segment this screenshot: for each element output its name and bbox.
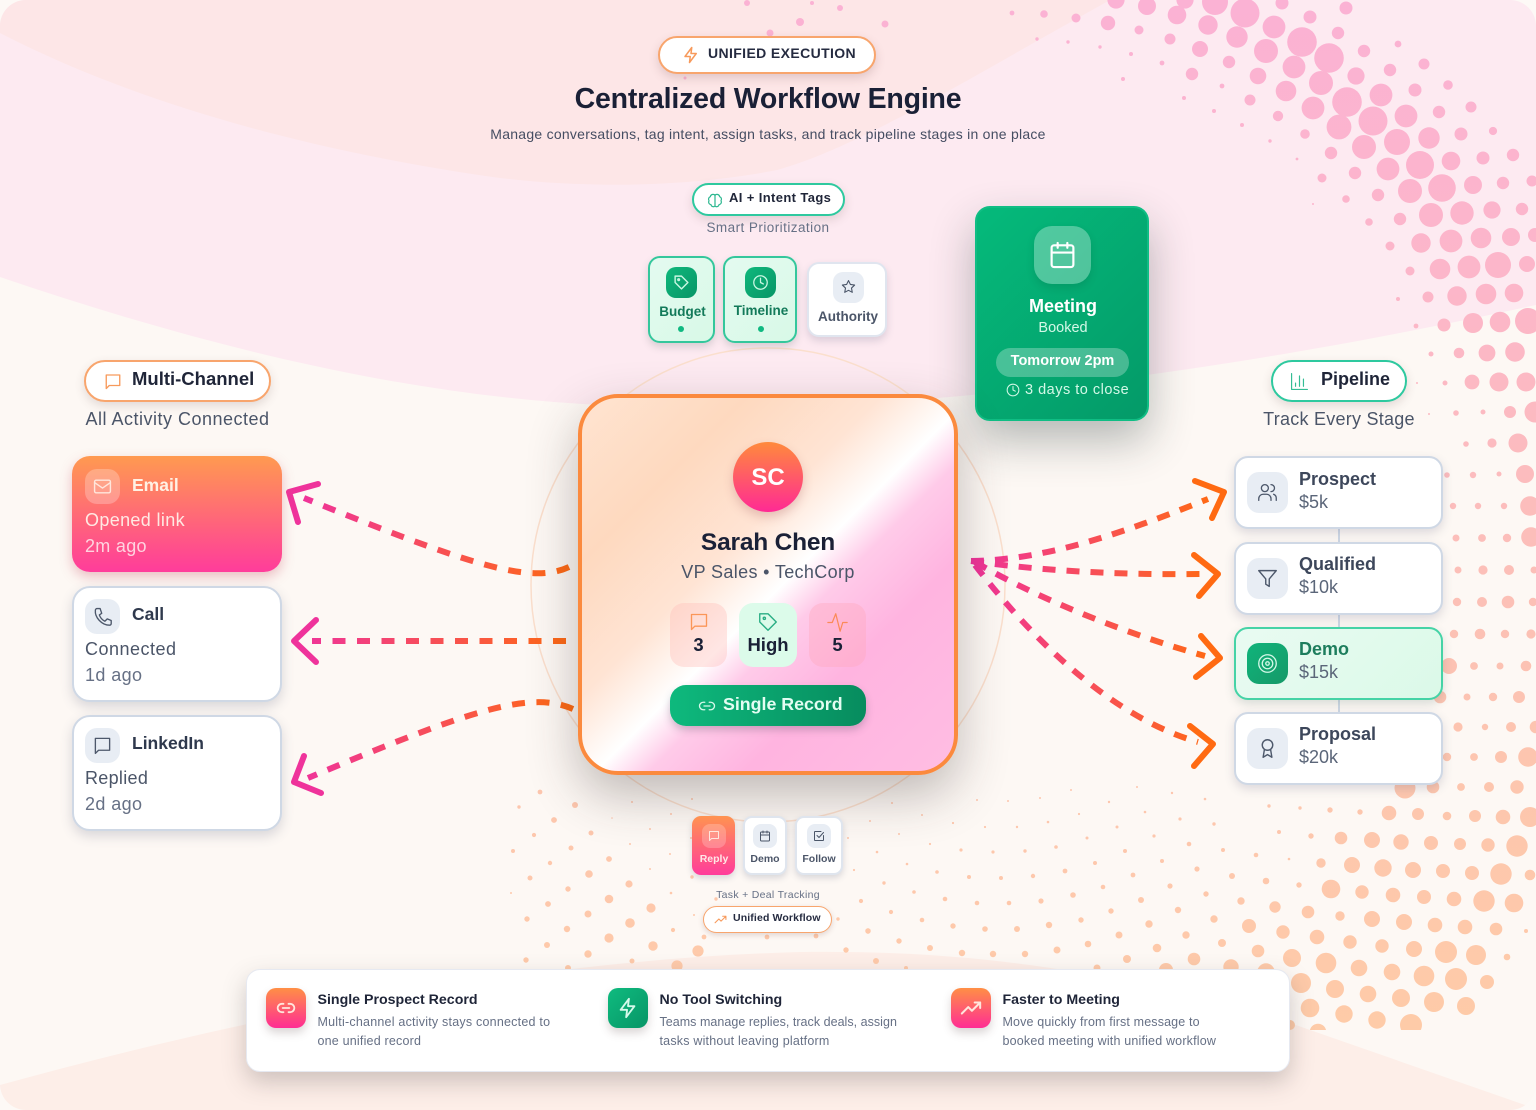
stat value: High	[747, 634, 789, 655]
booked label: Booked	[1038, 320, 1088, 336]
tag label: Budget	[659, 304, 706, 319]
benefit: faster to meeting	[947, 988, 1216, 1048]
card: call	[72, 586, 282, 702]
subtitle: Manage conversations, tag intent, assign tasks, and track pipeline stages in one place	[490, 126, 1046, 142]
caption: smart prioritization: Smart Prioritization	[706, 220, 830, 235]
icon: target	[1247, 643, 1288, 684]
caption: All Activity Connected	[85, 409, 270, 429]
tag: timeline	[723, 256, 797, 343]
action label: Demo	[750, 853, 780, 865]
pill label: Multi-Channel	[132, 368, 254, 389]
icon: activity	[827, 613, 848, 632]
action: demo	[743, 816, 787, 875]
caption: task and deal tracking: Task + Deal Tracking	[716, 889, 820, 901]
pill: multi-channel	[84, 360, 271, 402]
icon: mail	[85, 469, 120, 504]
stage value: $20k	[1299, 747, 1338, 767]
icon: trending up	[714, 916, 726, 924]
pill label: Pipeline	[1321, 369, 1390, 389]
benefit description: Move quickly from first message to	[1002, 1015, 1200, 1029]
job title: VP Sales • TechCorp	[681, 562, 855, 582]
stage name: Qualified	[1299, 554, 1376, 574]
icon: trending up	[951, 988, 991, 1028]
icon: tag	[666, 267, 697, 298]
icon: message	[702, 824, 726, 848]
stat value: 5	[832, 634, 843, 655]
icon: tag	[759, 613, 777, 631]
arrow: to demo	[975, 562, 1220, 677]
stage name: Prospect	[1299, 469, 1376, 489]
section header: multi-channel	[82, 360, 274, 429]
card status: Opened link	[85, 510, 185, 530]
card title: LinkedIn	[132, 733, 204, 753]
action label: Follow	[802, 853, 836, 865]
card time: 1d ago	[85, 665, 142, 685]
card time: 2m ago	[85, 536, 147, 556]
tag: authority	[807, 262, 887, 337]
name: Sarah Chen	[701, 529, 835, 556]
stage value: $10k	[1299, 577, 1338, 597]
action: follow	[795, 816, 843, 875]
badge: unified execution	[658, 36, 876, 74]
pill label: Unified Workflow	[733, 912, 821, 924]
pill: AI + Intent Tags	[692, 183, 845, 216]
pill: unified workflow	[703, 906, 832, 933]
icon: clock	[1006, 384, 1020, 396]
stage: qualified	[1234, 542, 1443, 615]
pill: pipeline	[1271, 360, 1407, 402]
stage value: $5k	[1299, 492, 1328, 512]
benefit description line 2: one unified record	[318, 1034, 421, 1048]
icon: calendar	[1034, 226, 1091, 284]
pill label: AI + Intent Tags	[729, 190, 831, 205]
icon: bar chart	[1291, 373, 1308, 390]
card: email	[72, 456, 282, 572]
icon: message	[690, 614, 708, 630]
icon: message	[85, 728, 120, 763]
benefit title: Faster to Meeting	[1002, 992, 1120, 1008]
icon: link	[266, 988, 306, 1028]
benefit description line 2: tasks without leaving platform	[660, 1034, 829, 1048]
arrow: to email	[289, 484, 569, 573]
benefit title: No Tool Switching	[660, 992, 782, 1008]
benefit description: Multi-channel activity stays connected to	[318, 1015, 550, 1029]
tag label: Authority	[818, 309, 878, 324]
icon: clock	[745, 267, 776, 298]
card: linkedin	[72, 715, 282, 831]
section header: pipeline	[1263, 360, 1415, 429]
stage name: Proposal	[1299, 724, 1376, 744]
arrow: to linkedin	[294, 702, 573, 793]
tag label: Timeline	[734, 303, 788, 318]
avatar	[733, 442, 803, 512]
days to close	[1006, 382, 1129, 398]
card title: Call	[132, 604, 164, 624]
panel: benefits	[246, 969, 1290, 1072]
stat: intent	[739, 603, 797, 667]
pill: tomorrow 2pm	[996, 348, 1129, 377]
action: reply	[692, 816, 735, 875]
card title: Email	[132, 475, 179, 495]
caption: Track Every Stage	[1263, 409, 1415, 429]
card status: Connected	[85, 639, 177, 659]
icon: users	[1247, 472, 1288, 513]
stage: demo	[1234, 627, 1443, 700]
arrow: to call	[294, 620, 566, 662]
benefit: single prospect record	[262, 988, 550, 1048]
arrow: to qualified	[971, 555, 1218, 596]
icon: message	[106, 374, 120, 390]
arrow: to proposal	[975, 565, 1213, 766]
icon: funnel	[1247, 558, 1288, 599]
stage: prospect	[1234, 456, 1443, 529]
icon: link	[698, 702, 716, 710]
icon: lightning bolt	[684, 46, 697, 64]
central profile card	[578, 394, 958, 775]
stage: proposal	[1234, 712, 1443, 785]
days label: 3 days to close	[1025, 382, 1129, 398]
tag: budget	[648, 256, 715, 343]
stat: messages	[670, 603, 727, 667]
stage value: $15k	[1299, 662, 1338, 682]
icon: phone	[85, 599, 120, 634]
card time: 2d ago	[85, 794, 142, 814]
pill label: Tomorrow 2pm	[1011, 353, 1114, 369]
status dot	[758, 326, 764, 332]
card status: Replied	[85, 768, 148, 788]
meeting heading: Meeting	[1029, 296, 1097, 316]
icon: star	[833, 272, 864, 303]
panel: meeting booked	[975, 206, 1149, 421]
panel: AI intent tags	[645, 183, 890, 350]
button: single record	[670, 685, 866, 726]
benefit description: Teams manage replies, track deals, assign	[660, 1015, 897, 1029]
avatar initials: SC	[751, 464, 785, 491]
icon: brain	[708, 194, 722, 208]
action label: Reply	[700, 853, 728, 865]
button label: Single Record	[723, 694, 843, 714]
stage name: Demo	[1299, 639, 1349, 659]
pipeline connector line	[1338, 525, 1340, 715]
icon: award	[1247, 728, 1288, 769]
icon: calendar	[753, 824, 777, 848]
arrow: to prospect	[971, 481, 1224, 561]
status dot	[678, 326, 684, 332]
stat: activity	[809, 603, 866, 667]
icon: lightning	[608, 988, 648, 1028]
badge label: UNIFIED EXECUTION	[708, 45, 856, 61]
icon: check square	[807, 824, 831, 848]
benefit description line 2: booked meeting with unified workflow	[1002, 1034, 1216, 1048]
benefit title: Single Prospect Record	[318, 992, 478, 1008]
stat value: 3	[693, 634, 704, 655]
benefit: no tool switching	[604, 988, 897, 1048]
title: Centralized Workflow Engine	[575, 83, 961, 115]
